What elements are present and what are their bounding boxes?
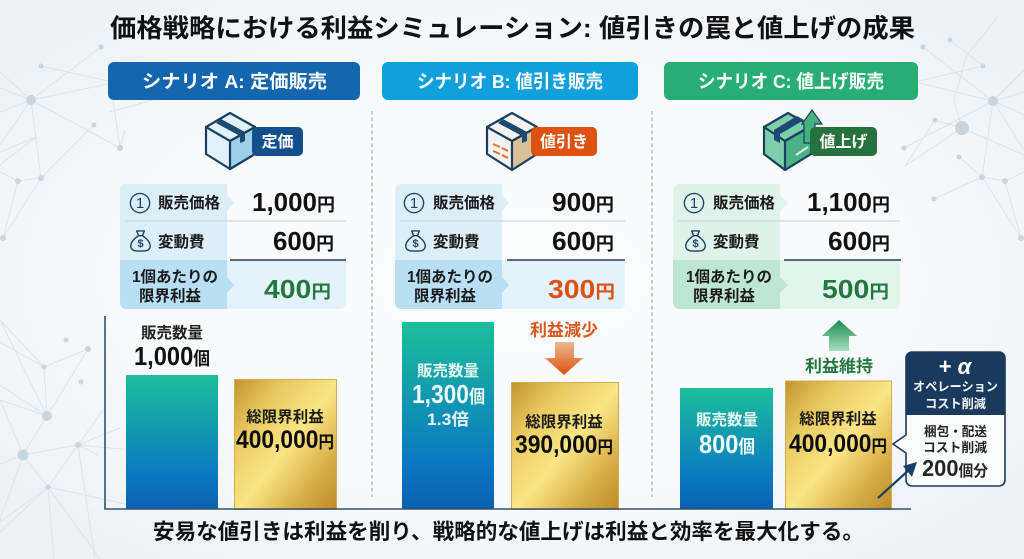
conclusion text: 安易な値引きは利益を削り、戦略的な値上げは利益と効率を最大化する。	[153, 520, 864, 544]
bar: sales volume C: 800個	[699, 431, 755, 459]
row: selling price: 1,000円	[252, 187, 335, 217]
title: 価格戦略における利益シミュレーション: 値引きの罠と値上げの成果	[110, 15, 915, 43]
heading: scenario C: シナリオ C: 値上げ販売	[698, 71, 884, 92]
row: variable cost	[406, 226, 614, 256]
panel: scenario A	[108, 62, 360, 510]
row: unit margin	[686, 268, 889, 305]
callout: operation cost reduction: 200個分	[922, 455, 988, 481]
row: unit margin: 限界利益	[693, 287, 755, 305]
row: selling price: 販売価格	[433, 193, 496, 212]
row: selling price: 販売価格	[713, 193, 776, 212]
panel divider: A and B	[371, 111, 373, 497]
icon: box with discount tag: 値引き	[540, 132, 588, 151]
row: selling price: 1	[690, 195, 698, 212]
table: scenario C unit economics	[673, 184, 901, 309]
row: unit margin: 1個あたりの	[407, 268, 493, 286]
bar: total margin A	[234, 380, 336, 510]
icon: box with price increase tag: 値上げ	[819, 132, 868, 151]
callout: operation cost reduction: + α	[939, 354, 973, 379]
bar: total margin B	[512, 382, 618, 510]
bar: sales volume B: 1.3倍	[427, 410, 470, 429]
row: variable cost: 600円	[273, 226, 334, 256]
row: selling price	[130, 187, 335, 217]
bar: total margin C: 400,000円	[789, 430, 887, 458]
row: variable cost: 変動費	[433, 232, 480, 251]
row: selling price: 900円	[552, 187, 614, 217]
row: unit margin: 300円	[548, 274, 615, 304]
heading: scenario A	[108, 62, 360, 100]
row: unit margin	[407, 268, 615, 305]
icon: box with discount tag	[487, 113, 597, 170]
panel: scenario B	[382, 62, 638, 510]
table: scenario A unit economics	[120, 184, 346, 309]
label: profit decrease: 利益減少	[530, 321, 598, 340]
row: selling price: 1	[136, 195, 144, 212]
icon: box with fixed price tag	[206, 113, 303, 169]
row: variable cost: 600円	[552, 226, 614, 256]
callout: operation cost reduction: コスト削減	[923, 440, 987, 455]
bar: total margin A: 総限界利益	[246, 408, 324, 426]
row: variable cost: 変動費	[158, 232, 205, 251]
heading: scenario B	[382, 62, 638, 100]
row: unit margin: 1個あたりの	[132, 268, 218, 286]
row: unit margin	[132, 268, 331, 305]
row: unit margin: 400円	[264, 274, 331, 304]
bar: sales volume B: 1,300個	[412, 381, 485, 409]
bar: total margin C	[786, 381, 892, 510]
row: variable cost: 変動費	[713, 232, 760, 251]
row: variable cost: $	[137, 238, 144, 250]
heading: scenario C	[664, 62, 918, 100]
chart axis	[105, 316, 911, 509]
bar: sales volume B: 販売数量	[417, 362, 479, 380]
arrow: cost reduction to callout	[878, 462, 917, 498]
bar: total margin A: 400,000円	[236, 426, 334, 454]
callout: operation cost reduction: コスト削減	[925, 396, 986, 411]
row: selling price	[404, 187, 614, 217]
bar: sales volume A	[126, 324, 218, 509]
row: selling price: 1,100円	[807, 187, 890, 217]
bar: total margin C: 総限界利益	[799, 410, 877, 428]
bar: sales volume A: 1,000個	[134, 343, 210, 371]
icon: box with price increase tag	[764, 110, 877, 170]
bar: sales volume B	[402, 322, 494, 509]
panel divider: B and C	[651, 111, 653, 497]
bar: total margin B: 総限界利益	[525, 413, 603, 431]
row: unit margin: 限界利益	[139, 287, 201, 305]
row: variable cost: $	[692, 238, 699, 250]
row: unit margin: 1個あたりの	[686, 268, 772, 286]
row: unit margin: 500円	[822, 274, 889, 304]
row: variable cost: $	[412, 238, 419, 250]
row: unit margin: 限界利益	[414, 287, 476, 305]
bar: total margin B: 390,000円	[515, 431, 613, 459]
bar: sales volume A: 販売数量	[141, 324, 203, 342]
heading: scenario A: シナリオ A: 定価販売	[142, 71, 327, 92]
row: selling price	[684, 187, 890, 217]
row: selling price: 1	[410, 195, 418, 212]
panel: scenario C	[664, 62, 1005, 510]
callout: operation cost reduction: 梱包・配送	[924, 424, 987, 439]
bar: sales volume C	[680, 388, 773, 509]
arrow: up	[822, 320, 857, 351]
icon: box with fixed price tag: 定価	[261, 133, 294, 151]
callout: operation cost reduction: オペレーション	[913, 380, 998, 394]
row: variable cost: 600円	[828, 226, 890, 256]
heading: scenario B: シナリオ B: 値引き販売	[417, 71, 603, 92]
bar: sales volume C: 販売数量	[696, 411, 758, 429]
table: scenario B unit economics	[395, 184, 625, 309]
row: variable cost	[131, 226, 334, 256]
arrow: down	[545, 342, 583, 375]
callout: operation cost reduction	[893, 352, 1005, 486]
row: selling price: 販売価格	[158, 193, 221, 212]
row: variable cost	[686, 226, 890, 256]
label: profit maintained: 利益維持	[805, 357, 873, 376]
